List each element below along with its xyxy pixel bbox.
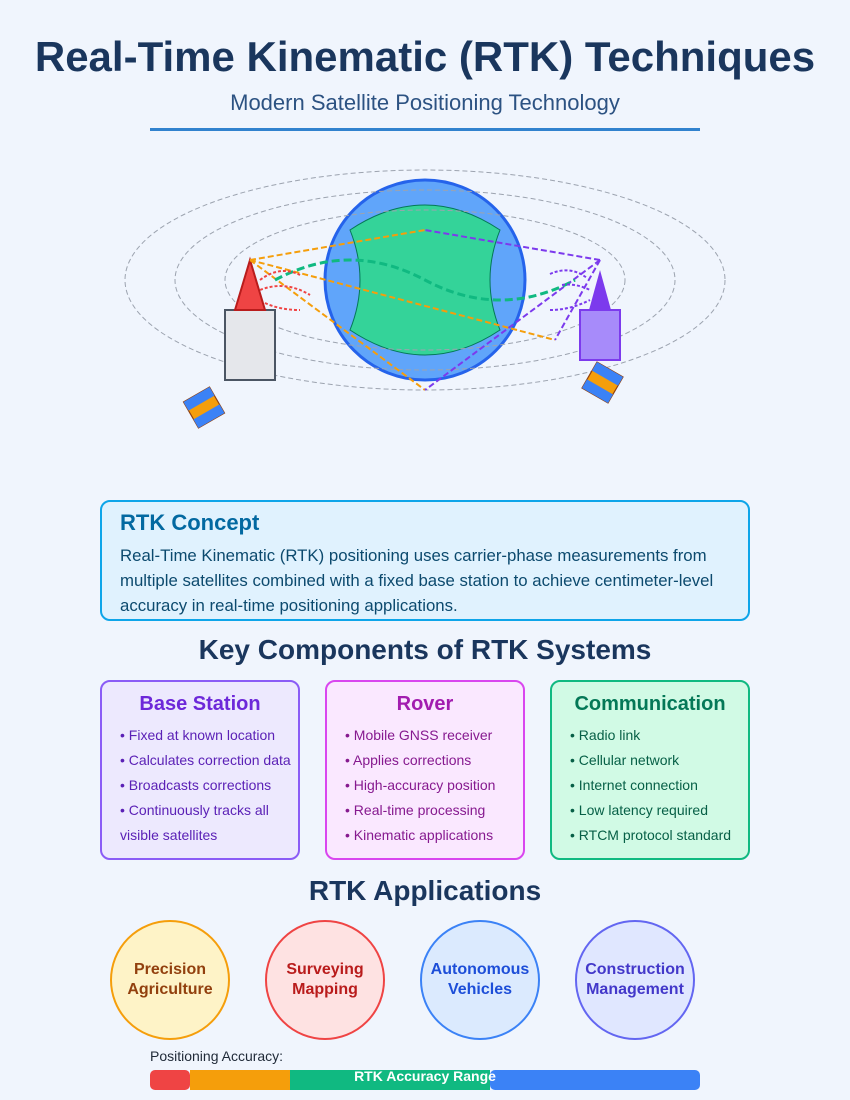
panel: rover: • Applies corrections	[345, 752, 471, 768]
title: Real-Time Kinematic (RTK) Techniques	[35, 33, 815, 80]
application: surveying mapping	[265, 920, 385, 1040]
panel: communication: • Cellular network	[570, 752, 679, 768]
base station	[225, 260, 275, 380]
panel: communication: • Radio link	[570, 727, 640, 743]
base radio waves	[260, 271, 310, 310]
accuracy bar	[150, 1068, 700, 1090]
panel: base station: visible satellites	[120, 827, 217, 843]
application: construction management	[575, 920, 695, 1040]
application: autonomous vehicles: Vehicles	[448, 981, 512, 998]
satellite signals to base	[250, 230, 555, 390]
panel: communication: • RTCM protocol standard	[570, 827, 731, 843]
panel: base station: • Continuously tracks all	[120, 802, 269, 818]
satellite left	[184, 387, 224, 428]
satellite right	[582, 362, 623, 403]
application: autonomous vehicles	[420, 920, 540, 1040]
panel: rover: • Real-time processing	[345, 802, 485, 818]
concept heading: RTK Concept	[120, 510, 259, 535]
application: precision agriculture	[110, 920, 230, 1040]
application: precision agriculture: Precision	[134, 961, 206, 978]
application: construction management: Management	[586, 981, 684, 998]
concept text: multiple satellites combined with a fixed base station to achieve centimeter-level	[120, 571, 713, 590]
diagram: RTK system	[124, 170, 726, 429]
panel: rover: Rover	[397, 693, 453, 715]
panel: base station: • Fixed at known location	[120, 727, 275, 743]
application: autonomous vehicles: Autonomous	[431, 961, 529, 978]
concept text: accuracy in real-time positioning applications.	[120, 596, 458, 615]
accuracy bar label: RTK Accuracy Range	[354, 1068, 496, 1084]
rover	[580, 270, 620, 360]
concept text	[120, 546, 713, 615]
rover radio waves	[550, 270, 590, 310]
heading: key components: Key Components of RTK Systems	[199, 634, 651, 665]
panel: communication: • Low latency required	[570, 802, 708, 818]
panel: base station: Base Station	[139, 693, 261, 715]
panel: communication: • Internet connection	[570, 777, 698, 793]
application: construction management: Construction	[585, 961, 685, 978]
panel: rover: • High-accuracy position	[345, 777, 495, 793]
subtitle: Modern Satellite Positioning Technology	[230, 90, 620, 115]
correction data link	[275, 260, 575, 300]
earth	[325, 180, 525, 380]
panel: rover: • Mobile GNSS receiver	[345, 727, 492, 743]
panel: RTK concept	[100, 500, 750, 621]
concept text: Real-Time Kinematic (RTK) positioning uses carrier-phase measurements from	[120, 546, 707, 565]
panel: rover	[325, 680, 525, 860]
heading: applications: RTK Applications	[309, 875, 541, 906]
panel: base station: • Broadcasts corrections	[120, 777, 271, 793]
application: surveying mapping: Surveying	[286, 961, 364, 978]
application: precision agriculture: Agriculture	[127, 981, 213, 998]
satellite orbits	[125, 170, 725, 390]
panel: communication	[550, 680, 750, 860]
satellite signals to rover	[425, 230, 600, 390]
title underline	[150, 128, 700, 131]
panel: base station: • Calculates correction data	[120, 752, 291, 768]
panel: rover: • Kinematic applications	[345, 827, 493, 843]
panel: base station	[100, 680, 300, 860]
application: surveying mapping: Mapping	[292, 981, 358, 998]
accuracy label: Positioning Accuracy:	[150, 1048, 283, 1064]
panel: communication: Communication	[574, 693, 726, 715]
